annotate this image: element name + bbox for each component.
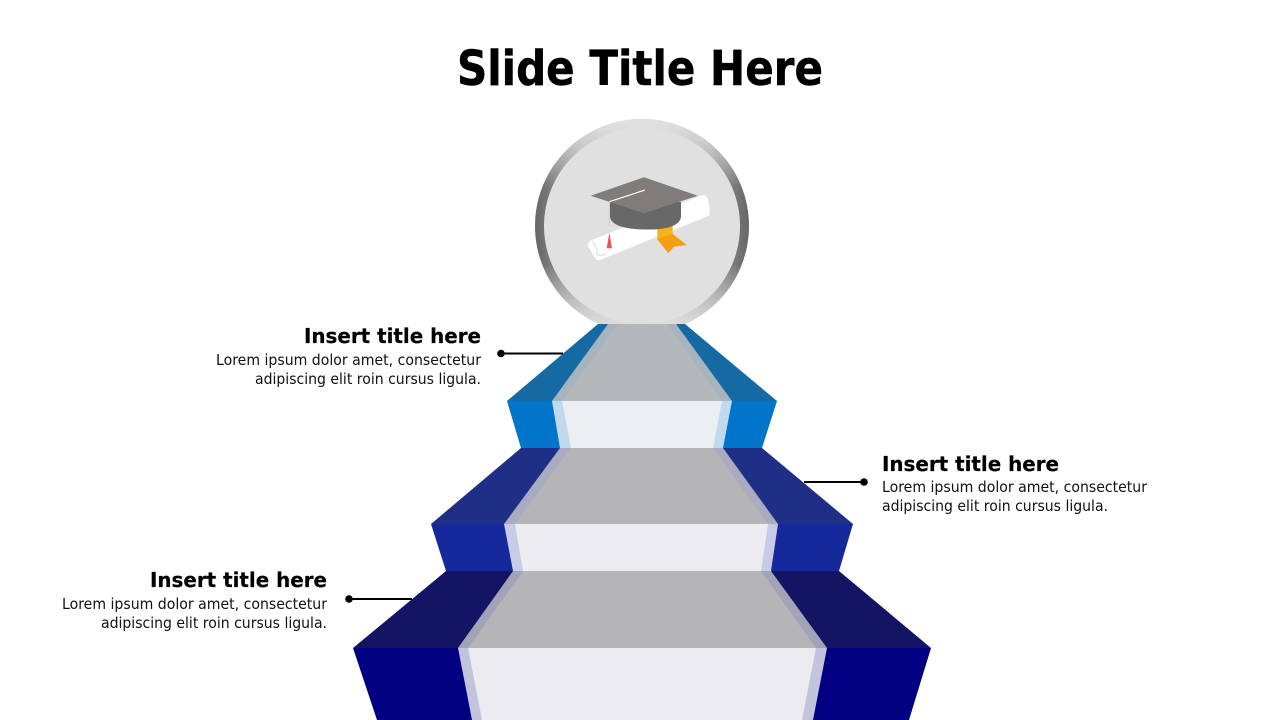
title: Slide Title Here — [457, 41, 823, 97]
heading: bottom left: Insert title here — [150, 568, 327, 592]
icon: graduation badge circle — [535, 119, 749, 333]
heading: top left: Insert title here — [304, 324, 481, 348]
callout: bottom left — [62, 568, 412, 632]
icon: diploma scroll — [592, 200, 705, 256]
text block: right: Lorem ipsum dolor amet, consectetur — [882, 478, 1148, 496]
connector: bottom left — [345, 595, 412, 603]
panel: middle step — [431, 448, 853, 571]
connector: right — [804, 478, 868, 486]
panel: top step — [507, 324, 777, 448]
text block: bottom left: adipiscing elit roin cursus ligula. — [101, 614, 327, 632]
icon: ribbon — [657, 222, 687, 253]
callout: top left — [216, 324, 563, 388]
text block: top left: Lorem ipsum dolor amet, consectetur — [216, 351, 482, 369]
text block: top left — [216, 351, 482, 388]
text block: top left: adipiscing elit roin cursus ligula. — [255, 370, 481, 388]
callout: right — [804, 452, 1148, 515]
text block: right: adipiscing elit roin cursus ligula. — [882, 497, 1108, 515]
text block: bottom left — [62, 595, 328, 632]
text block: bottom left: Lorem ipsum dolor amet, consectetur — [62, 595, 328, 613]
icon: graduation cap — [591, 177, 698, 230]
text block: right — [882, 478, 1148, 515]
panel: bottom step — [353, 571, 931, 720]
connector: top left — [497, 350, 563, 357]
heading: right: Insert title here — [882, 452, 1059, 476]
